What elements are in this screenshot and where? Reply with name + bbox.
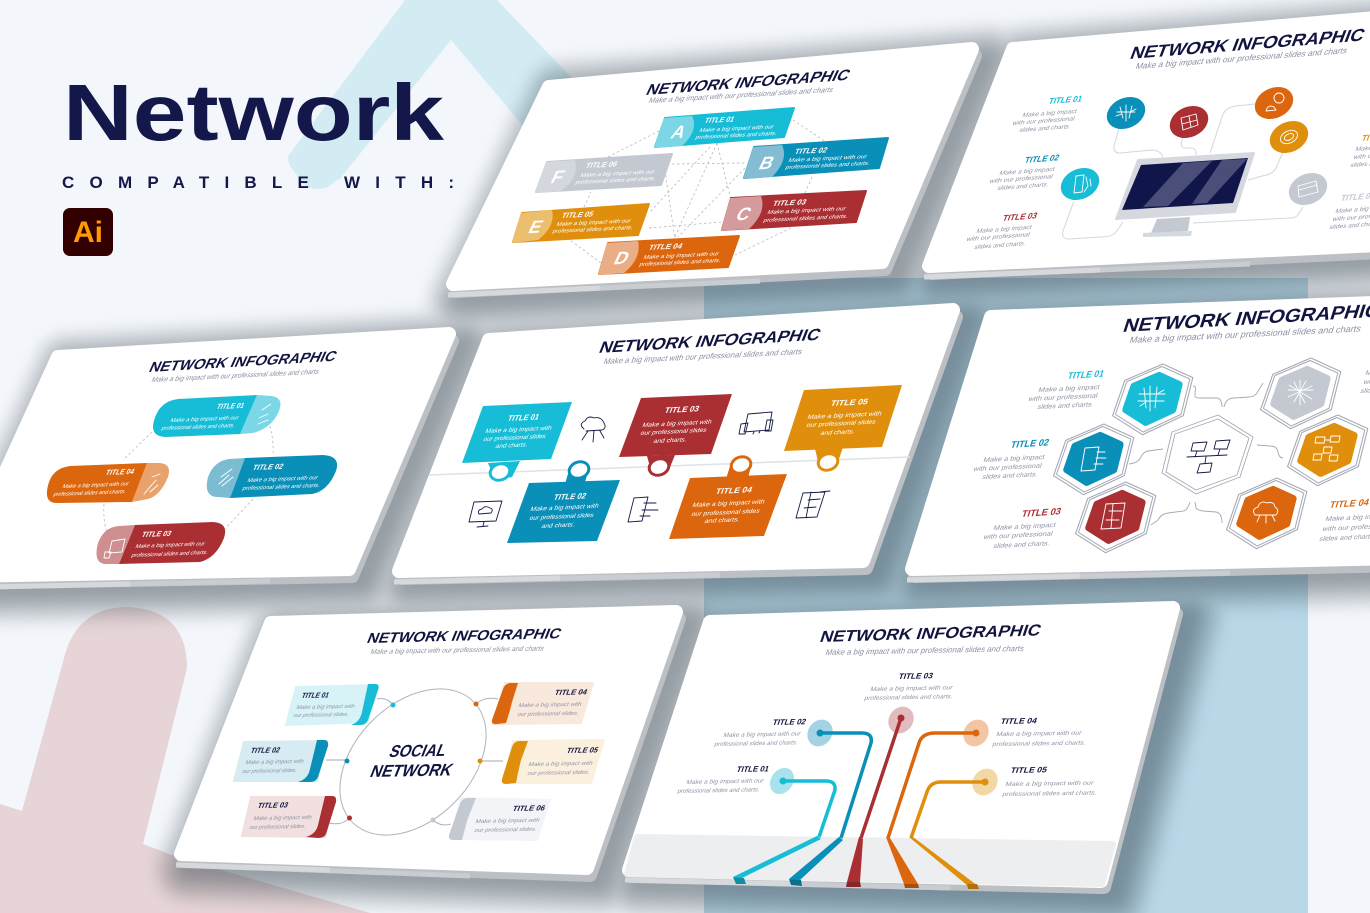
card: title 03: our professional slides xyxy=(639,427,708,437)
text: title 05: TITLE 05 xyxy=(1009,765,1049,775)
hexagon: red circuit board xyxy=(1076,482,1156,553)
text: title 02 xyxy=(971,438,1051,481)
card E: title 05: TITLE 05 xyxy=(560,210,596,220)
pill: title 03: Make a big impact with our xyxy=(134,541,206,550)
text: title 03: TITLE 03 xyxy=(1001,211,1039,223)
card B: title 02 xyxy=(743,138,888,179)
heading: NETWORK INFOGRAPHIC xyxy=(364,626,564,647)
card: title 04: TITLE 04 xyxy=(714,484,754,496)
panel: middle left pill slide xyxy=(0,334,452,587)
pill: title 04: professional slides and charts. xyxy=(52,489,127,498)
card A: title 01: A xyxy=(667,122,690,143)
card: title 03: TITLE 03 xyxy=(663,404,701,415)
timeline line xyxy=(429,457,910,475)
text: title 03: Make a big impact xyxy=(992,522,1057,532)
card C: title 03: TITLE 03 xyxy=(771,198,809,208)
card: title 05: our professional slides. xyxy=(526,770,591,777)
subtitle: Make a big impact with our professional slides and charts xyxy=(602,346,804,366)
text: title 02: TITLE 02 xyxy=(1023,153,1061,165)
icon: devices xyxy=(739,412,773,434)
text: title 04: TITLE 04 xyxy=(1328,497,1370,511)
icon: browser circle xyxy=(1284,167,1332,211)
icon: puzzle circle xyxy=(1165,100,1213,144)
text: title 03: professional slides and charts. xyxy=(863,693,954,702)
card: title 05: TITLE 05 xyxy=(829,396,870,408)
card: title 02: our professional slides xyxy=(528,512,595,522)
card: title 03: Make a big impact with xyxy=(252,815,313,822)
text: title 04 xyxy=(1318,497,1370,543)
subtitle: Make a big impact with our professional slides and charts xyxy=(1134,45,1349,71)
card D: title 04 xyxy=(598,236,739,275)
card: title 01: Make a big impact with xyxy=(295,704,356,711)
hexagon: orange cloud xyxy=(1227,478,1307,549)
text: title 02: with our professional xyxy=(971,463,1043,473)
subtitle: Make a big impact with our professional slides and charts xyxy=(824,644,1025,657)
text: title 02: Make a big impact xyxy=(998,166,1056,177)
card: title 03 xyxy=(619,394,732,478)
text: title 01: Make a big impact with our xyxy=(685,778,765,786)
card: title 01: TITLE 01 xyxy=(300,691,331,700)
icon: phone circuit xyxy=(628,497,658,522)
text: social network: SOCIAL xyxy=(386,740,450,761)
card: title 03 xyxy=(242,796,336,838)
card: title 04: Make a big impact with xyxy=(691,499,766,509)
heading: NETWORK INFOGRAPHIC xyxy=(596,324,824,357)
heading: NETWORK INFOGRAPHIC xyxy=(818,622,1044,646)
card: title 04: TITLE 04 xyxy=(553,688,589,697)
card: title 01: our professional slides. xyxy=(292,712,350,719)
card: title 04: our professional slides. xyxy=(516,711,580,718)
pill: title 03: professional slides and charts. xyxy=(130,550,209,559)
text: title 06 xyxy=(1328,191,1370,231)
icon: Adobe Illustrator: Ai xyxy=(73,216,103,249)
subtitle: Make a big impact with our professional slides and charts xyxy=(647,85,835,105)
panel: top right monitor slide xyxy=(924,16,1370,277)
card B: title 02: TITLE 02 xyxy=(793,146,830,156)
pill: title 02: professional slides and charts. xyxy=(241,483,321,492)
text: title 03: slides and charts. xyxy=(973,240,1027,251)
line: yellow xyxy=(909,764,1003,889)
icon: phone circle xyxy=(1056,162,1104,206)
pill: title 01: professional slides and charts. xyxy=(160,423,236,432)
text: title 02: Make a big impact xyxy=(982,454,1046,464)
panel: bottom left social network slide xyxy=(176,612,679,876)
card: title 04: and charts. xyxy=(703,516,741,525)
card: title 05 xyxy=(784,385,902,473)
card: title 02: and charts. xyxy=(540,522,576,530)
card: title 02: TITLE 02 xyxy=(552,491,588,502)
floor band xyxy=(627,837,1113,884)
connector lines xyxy=(1129,383,1283,525)
connectors and dots xyxy=(326,698,503,825)
text: title 03: TITLE 03 xyxy=(897,671,935,681)
text: social network xyxy=(367,740,456,781)
heading: NETWORK INFOGRAPHIC xyxy=(1128,25,1368,63)
card: title 01 xyxy=(286,684,379,725)
connector wires xyxy=(1063,104,1303,239)
text: title 01: slides and charts. xyxy=(1036,401,1095,411)
centre hexagon: network icon xyxy=(1162,415,1253,494)
text: title 01: TITLE 01 xyxy=(735,765,771,774)
card: title 04 xyxy=(492,683,593,724)
card: title 01: TITLE 01 xyxy=(506,412,541,423)
card: title 03: Make a big impact with xyxy=(641,419,713,429)
text: title 03 xyxy=(981,506,1063,550)
icon: circuit circle xyxy=(1102,91,1150,135)
text: title 02 xyxy=(713,718,808,748)
text: title 02: with our professional xyxy=(987,173,1054,185)
pill: title 04: Make a big impact with our xyxy=(61,482,130,490)
panel: middle right hexagon slide xyxy=(907,300,1370,580)
card: title 05: and charts. xyxy=(819,428,856,437)
card: title 06: our professional slides. xyxy=(473,827,538,834)
icon: cloud network xyxy=(581,417,605,442)
card: title 06 xyxy=(449,798,550,840)
subtitle: Make a big impact with our professional slides and charts xyxy=(150,367,321,384)
card A: title 01 xyxy=(654,108,794,148)
card: title 02 xyxy=(234,740,328,782)
line: blue xyxy=(789,715,871,886)
subtitle: Make a big impact with our professional slides and charts xyxy=(369,644,546,656)
text: title 03: with our professional xyxy=(964,231,1031,243)
line: red xyxy=(846,702,919,887)
line: orange xyxy=(886,715,994,888)
card E: title 05: professional slides and charts. xyxy=(551,225,634,235)
card: title 05: our professional slides xyxy=(805,419,877,429)
card: title 04: our professional slides xyxy=(690,508,761,518)
text: title 02: professional slides and charts. xyxy=(713,739,799,748)
pill: title 02: Make a big impact with our xyxy=(246,475,319,484)
pill: title 03 xyxy=(97,522,225,564)
text: title 04: professional slides and charts. xyxy=(991,740,1087,748)
card: title 02: Make a big impact with xyxy=(529,503,600,513)
card D: title 04: Make a big impact with our xyxy=(642,251,720,261)
card: title 06: Make a big impact with xyxy=(474,818,541,825)
hexagon: blue phone circuit xyxy=(1054,424,1134,495)
card C: title 03: Make a big impact with our xyxy=(766,206,847,216)
text: title 04: Make a big impact with our xyxy=(995,730,1083,738)
icon: fingerprint circle xyxy=(1265,115,1313,159)
pill: title 03: TITLE 03 xyxy=(140,529,174,539)
card F: title 06 xyxy=(535,154,672,193)
text: title 01: professional slides and charts. xyxy=(676,786,761,795)
icon: Adobe Illustrator xyxy=(63,208,113,256)
text: title 05 xyxy=(1001,765,1098,798)
text: title 03: Make a big impact xyxy=(975,224,1033,235)
card: title 01 xyxy=(462,402,572,483)
card F: title 06: professional slides and charts. xyxy=(574,176,657,186)
hexagon: cyan circuit xyxy=(1113,364,1193,435)
card E: title 05: E xyxy=(525,218,546,238)
card: title 05: Make a big impact with xyxy=(806,410,883,421)
card D: title 04: professional slides and charts. xyxy=(638,258,722,268)
card F: title 06: Make a big impact with our xyxy=(579,170,656,179)
text: title 05 xyxy=(1359,367,1370,395)
pill: title 01: Make a big impact with our xyxy=(169,415,240,424)
text: title 02: TITLE 02 xyxy=(1009,438,1051,451)
card: title 02: Make a big impact with xyxy=(244,759,305,766)
text: title 01 xyxy=(1026,369,1106,411)
text: title 01: Make a big impact xyxy=(1037,384,1101,394)
card: title 03: TITLE 03 xyxy=(256,801,290,810)
heading: NETWORK INFOGRAPHIC xyxy=(1120,300,1370,337)
card: title 05: TITLE 05 xyxy=(565,746,600,755)
card: title 03: our professional slides. xyxy=(248,824,307,831)
text: title 02 xyxy=(987,153,1061,192)
pill: title 01 xyxy=(153,395,280,437)
card A: title 01: professional slides and charts. xyxy=(694,131,778,141)
card F: title 06: F xyxy=(547,168,568,188)
icon: circuit board xyxy=(796,491,830,518)
subtitle: Make a big impact with our professional slides and charts xyxy=(1128,324,1363,345)
card A: title 01: TITLE 01 xyxy=(703,115,737,125)
card: title 04 xyxy=(669,454,787,539)
card F: title 06: TITLE 06 xyxy=(584,160,620,170)
text: title 01: slides and charts. xyxy=(1018,123,1072,134)
text: title 04: slides and charts. xyxy=(1318,533,1370,543)
card C: title 03 xyxy=(721,191,866,231)
text: compatible with: COMPATIBLE WITH: xyxy=(62,173,454,192)
hexagon: grey chip xyxy=(1261,358,1341,429)
text: title 01: Make a big impact xyxy=(1021,108,1078,119)
hexagon: yellow diagram xyxy=(1288,415,1368,486)
network ellipse xyxy=(312,661,514,863)
line: cyan xyxy=(733,763,835,884)
text: title 01: with our professional xyxy=(1010,116,1076,127)
card: title 01: our professional slides xyxy=(482,433,547,443)
text: title 02: Make a big impact with our xyxy=(722,731,802,739)
card: title 02: TITLE 02 xyxy=(249,746,282,755)
pill: title 04: TITLE 04 xyxy=(104,467,137,477)
panel: middle centre timeline slide xyxy=(394,310,956,582)
card: title 02: our professional slides. xyxy=(241,768,298,775)
card B: title 02: B xyxy=(755,154,778,174)
pill: title 02: TITLE 02 xyxy=(251,462,286,472)
card: title 05 xyxy=(502,740,604,784)
card D: title 04: D xyxy=(610,249,633,269)
card: title 01: Make a big impact with xyxy=(484,425,553,435)
icon: people circle xyxy=(1250,81,1298,125)
text: title 03: TITLE 03 xyxy=(1020,506,1063,520)
text: title 02: slides and charts. xyxy=(981,471,1039,481)
text: title 03: with our professional xyxy=(981,531,1054,541)
monitor xyxy=(1116,153,1254,237)
card: title 02 xyxy=(507,459,620,543)
text: title 01: with our professional xyxy=(1026,393,1099,403)
card D: title 04: TITLE 04 xyxy=(647,242,685,252)
card: title 03: and charts. xyxy=(652,437,688,445)
pill: title 02 xyxy=(207,455,337,498)
text: title 04: TITLE 04 xyxy=(999,716,1039,726)
text: title 03 xyxy=(964,211,1039,251)
text: title 02: TITLE 02 xyxy=(771,718,808,727)
card: title 05: Make a big impact with xyxy=(527,761,594,768)
text: title 01: TITLE 01 xyxy=(1047,94,1084,106)
dashed connection lines xyxy=(570,120,826,263)
card B: title 02: Make a big impact with our xyxy=(787,154,868,164)
panel: bottom right lines slide xyxy=(625,608,1176,889)
card: title 04: Make a big impact with xyxy=(517,702,583,709)
text: title 05 xyxy=(1349,131,1370,169)
pill: title 01: TITLE 01 xyxy=(215,401,247,411)
text: title 03: slides and charts. xyxy=(992,540,1051,550)
card E: title 05: Make a big impact with our xyxy=(555,219,632,228)
card C: title 03: C xyxy=(732,204,755,225)
text: title 04 xyxy=(991,716,1087,748)
text: title 05: Make a big impact with our xyxy=(1004,780,1095,788)
dashed ring xyxy=(104,426,273,533)
text: title 03: Make a big impact with our xyxy=(869,684,954,693)
heading: NETWORK INFOGRAPHIC xyxy=(146,348,340,376)
title: Network: Network xyxy=(63,68,445,157)
card E: title 05 xyxy=(512,204,649,243)
card B: title 02: professional slides and charts. xyxy=(784,161,871,171)
text: title 01 xyxy=(676,765,771,795)
card: title 01: and charts. xyxy=(494,442,529,450)
card C: title 03: professional slides and charts. xyxy=(762,214,849,224)
text: social network: NETWORK xyxy=(367,760,456,781)
text: title 03 xyxy=(863,671,954,702)
card: title 06: TITLE 06 xyxy=(511,804,547,813)
panel: top centre hexagon network slide xyxy=(448,49,975,295)
pill: title 04 xyxy=(47,463,169,503)
text: title 02: slides and charts. xyxy=(996,181,1050,192)
card A: title 01: Make a big impact with our xyxy=(698,125,775,134)
heading: NETWORK INFOGRAPHIC xyxy=(643,67,853,99)
text: title 01 xyxy=(1010,94,1084,134)
text: title 01: TITLE 01 xyxy=(1066,369,1106,382)
icon: cloud monitor xyxy=(469,501,502,527)
text: title 05: professional slides and charts. xyxy=(1001,790,1098,798)
